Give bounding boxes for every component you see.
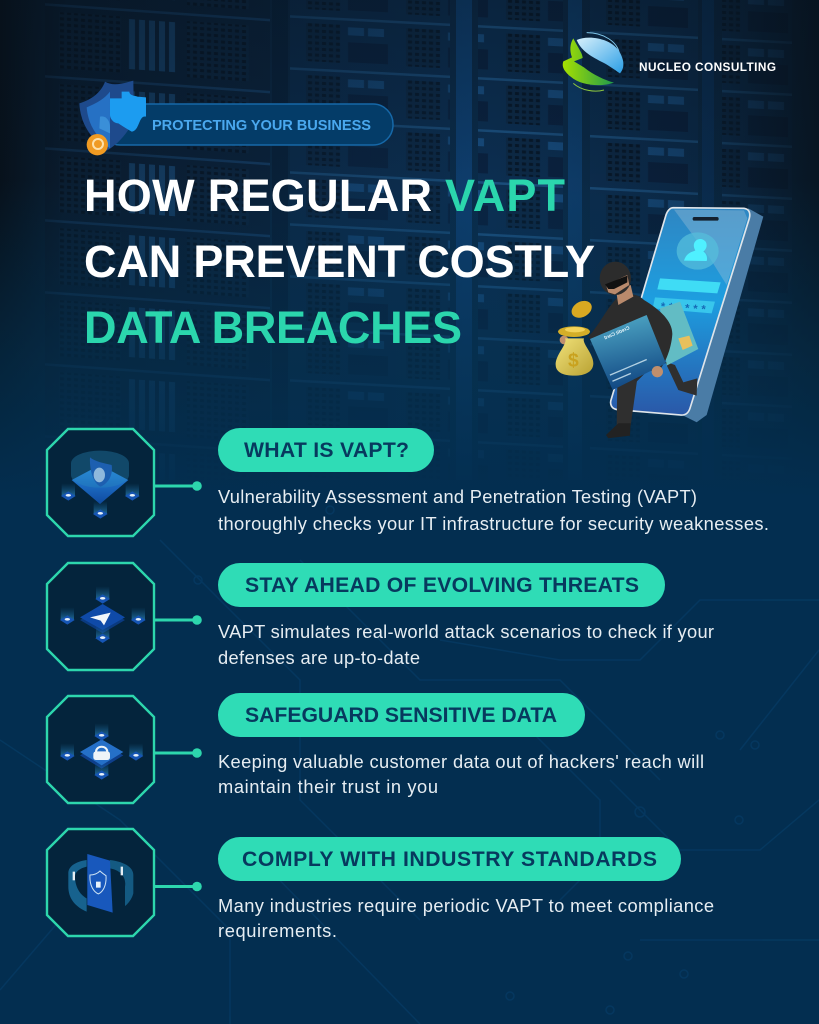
heading pill: WHAT IS VAPT? [244,439,409,462]
title: VAPT [445,170,565,221]
description: maintain their trust in you [218,776,438,797]
description [218,751,704,797]
tag: protecting your business [79,81,393,155]
description [218,486,769,534]
description: VAPT simulates real-world attack scenarios to check if your [218,621,714,642]
icon: shield with puzzle pieces [79,81,146,155]
description: Many industries require periodic VAPT to meet compliance [218,895,714,916]
money bag and coin [556,298,595,376]
connector [155,481,202,491]
item 1: what is VAPT [47,428,769,536]
tag text: PROTECTING YOUR BUSINESS [152,118,371,134]
heading pill [218,428,434,472]
icon panel: navigation arrow [47,563,154,670]
thief: Credit Card [603,325,631,341]
heading pill [218,563,665,607]
description: thoroughly checks your IT infrastructure for security weaknesses. [218,513,769,534]
phone [611,208,763,422]
heading pill [218,837,681,881]
illustration: thief stealing card from phone [556,208,763,438]
connector [155,882,202,891]
logo: Nucleo Consulting [563,33,776,91]
description: defenses are up-to-date [218,647,420,668]
heading pill: STAY AHEAD OF EVOLVING THREATS [245,574,639,597]
thief [588,262,698,438]
item 3: safeguard [47,693,704,803]
icon panel: fingerprint shield [47,429,154,536]
item 4: comply [47,829,714,941]
item 2: stay ahead [47,563,714,670]
description [218,895,714,941]
icon panel: padlock [47,696,154,803]
connector [155,748,202,758]
icon panel: phone with shield [47,829,154,936]
description: requirements. [218,920,337,941]
tag pill [100,104,393,145]
title: CAN PREVENT COSTLY [84,236,595,287]
heading pill: SAFEGUARD SENSITIVE DATA [245,704,557,727]
phone: ****** [660,301,707,316]
description [218,621,714,668]
heading pill [218,693,585,737]
description: Vulnerability Assessment and Penetration Testing (VAPT) [218,486,697,507]
title [84,170,595,353]
description: Keeping valuable customer data out of hackers' reach will [218,751,704,772]
money bag and coin: $ [568,350,579,371]
logo name: NUCLEO CONSULTING [639,60,776,74]
logo mark [563,33,623,91]
heading pill: COMPLY WITH INDUSTRY STANDARDS [242,848,657,871]
connector [155,615,202,625]
title: DATA BREACHES [84,302,462,353]
title: HOW REGULAR [84,170,432,221]
